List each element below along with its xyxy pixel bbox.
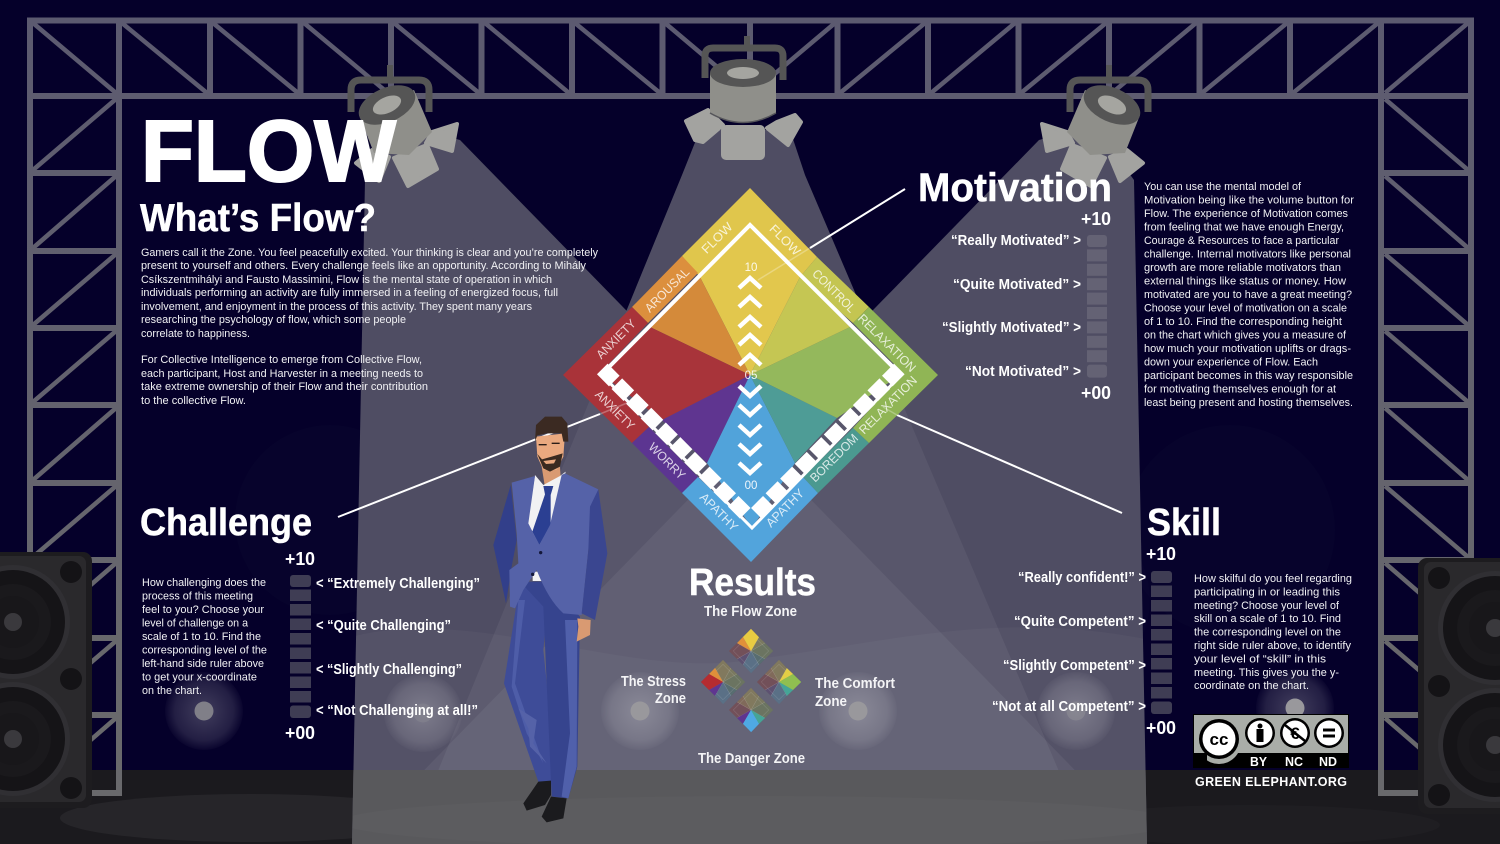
challenge text: scale of 1 to 10. Find the (142, 631, 261, 643)
skill heading: Skill (1147, 502, 1221, 544)
lamp: centre (686, 36, 801, 160)
hand (577, 618, 591, 642)
motivation text: on the chart which gives you a measure of (1144, 330, 1347, 342)
motivation scale: “Quite Motivated” > (953, 277, 1081, 293)
left sleeve (493, 485, 517, 603)
band labels: RELAXATION (856, 373, 920, 437)
skill scale: “Quite Competent” > (1014, 614, 1146, 630)
creative commons badge: € (1290, 724, 1300, 743)
skill scale: +10 (1146, 544, 1176, 564)
skill text: the corresponding level on the (1194, 627, 1341, 639)
intro text: each participant, Host and Harvester in a meeting needs to (141, 368, 423, 380)
inner wedges (600, 225, 903, 528)
band labels: AROUSAL (642, 265, 692, 315)
motivation text: how much your motivation uplifts or drags- (1144, 343, 1351, 355)
skill scale: “Not at all Competent” > (992, 699, 1146, 715)
challenge scale: +10 (285, 549, 315, 569)
motivation scale (942, 209, 1111, 403)
speaker left (0, 552, 92, 808)
motivation text: of 1 to 10. Find the corresponding height (1144, 316, 1343, 328)
neck and face (535, 417, 568, 487)
intro text (141, 247, 598, 407)
up chevrons (739, 278, 761, 365)
motivation scale: +00 (1081, 383, 1111, 403)
skill text: right side ruler above, to identify (1194, 640, 1351, 652)
skill text: participating in or leading this (1194, 586, 1340, 598)
band labels: WORRY (646, 440, 688, 483)
challenge text: level of challenge on a (142, 618, 249, 630)
challenge text: to get your x-coordinate (142, 672, 257, 684)
intro text: individuals performing an activity are fully immersed in a feeling of energized focus, full (141, 287, 558, 299)
motivation scale: “Not Motivated” > (965, 364, 1081, 380)
panel: challenge (140, 502, 480, 743)
challenge scale: < “Extremely Challenging” (316, 576, 480, 592)
skill text: your level of “skill” in this (1194, 653, 1326, 665)
creative commons badge (1193, 714, 1349, 769)
intro text: take extreme ownership of their Flow and their contribution (141, 381, 428, 393)
website: GREEN ELEPHANT.ORG (1195, 775, 1347, 789)
results heading: Results (689, 562, 816, 604)
challenge text (142, 577, 267, 697)
mini diamond: comfort zone (757, 660, 801, 704)
skill text (1194, 573, 1352, 692)
zone labels: The Danger Zone (698, 751, 805, 767)
motivation text (1144, 181, 1354, 409)
band labels: ANXIETY (594, 316, 639, 362)
mini diamond: flow zone (729, 629, 773, 673)
scale numbers: 05 (745, 370, 757, 382)
challenge text: on the chart. (142, 685, 202, 697)
motivation text: external things like status or money. How (1144, 276, 1347, 288)
zone labels: Zone (655, 691, 686, 707)
motivation text: growth are more reliable motivators than (1144, 262, 1341, 274)
motivation heading: Motivation (918, 166, 1112, 210)
outer band segments (563, 188, 938, 562)
intro text: Csíkszentmihályi and Fausto Massimini, Flow is the mental state of operation in which (141, 274, 552, 286)
band labels: CONTROL (809, 267, 858, 316)
motivation text: challenge. Internal motivators like personal (1144, 248, 1351, 260)
shoes (523, 781, 567, 822)
faint callout lines over chart (600, 248, 897, 415)
speaker right (1418, 558, 1500, 814)
shirt (528, 472, 566, 545)
zone labels (621, 604, 895, 767)
creative commons badge: BY (1250, 755, 1268, 769)
motivation text: Courage & Resources to face a particular (1144, 235, 1339, 247)
motivation text: Flow. The experience of Motivation comes (1144, 208, 1348, 220)
panel: results (621, 562, 895, 767)
challenge text: left-hand side ruler above (142, 658, 264, 670)
skill scale: “Really confident!” > (1018, 570, 1146, 586)
motivation text: down your experience of Flow. Each (1144, 356, 1318, 368)
floor (0, 770, 1500, 844)
presenter figure (493, 417, 607, 822)
intro text: present to yourself and others. Every challenge feels like an opportunity. According to Mihály (141, 260, 586, 272)
challenge scale: < “Quite Challenging” (316, 618, 451, 634)
band labels: FLOW (699, 220, 736, 257)
challenge text: process of this meeting (142, 590, 253, 602)
spotlight beams (340, 125, 1180, 844)
skill text: How skilful do you feel regarding (1194, 573, 1352, 585)
challenge scale (285, 549, 480, 743)
motivation text: participant becomes in this way responsible (1144, 370, 1353, 382)
band labels: FLOW (766, 222, 803, 259)
skill text: coordinate on the chart. (1194, 680, 1309, 692)
band labels: APATHY (697, 490, 741, 535)
motivation text: Motivation being like the volume button for (1144, 194, 1354, 206)
subtitle: What’s Flow? (140, 197, 376, 240)
callout lines (338, 189, 1122, 517)
floor light glows (165, 669, 1334, 752)
band labels: ANXIETY (592, 388, 638, 433)
intro text: Gamers call it the Zone. You feel peacefully excited. Your thinking is clear and you’re completely (141, 247, 598, 259)
trousers (504, 582, 580, 798)
motivation text: Choose your level of motivation on a scale (1144, 302, 1347, 314)
motivation scale: “Slightly Motivated” > (942, 320, 1081, 336)
intro text: to the collective Flow. (141, 395, 246, 407)
creative commons badge: NC (1285, 755, 1303, 769)
skill text: meeting? Choose your level of (1194, 600, 1340, 612)
tie (532, 486, 553, 545)
challenge text: corresponding level of the (142, 644, 267, 656)
zone labels: The Comfort (815, 676, 895, 692)
intro text: involvement, and enjoyment in the process of this activity. They spent many years (141, 301, 532, 313)
motivation text: from feeling that we have enough Energy, (1144, 222, 1344, 234)
scale numbers (745, 262, 757, 492)
band labels: RELAXATION (855, 311, 919, 375)
motivation text: least being present and hosting themselves. (1144, 397, 1353, 409)
skill scale: “Slightly Competent” > (1003, 658, 1146, 674)
challenge text: How challenging does the (142, 577, 266, 589)
skill scale: +00 (1146, 718, 1176, 738)
skill text: skill on a scale of 1 to 10. Find (1194, 613, 1341, 625)
creative commons badge: cc (1210, 730, 1228, 749)
motivation text: for motivating themselves enough for at (1144, 384, 1337, 396)
motivation scale: “Really Motivated” > (951, 233, 1081, 249)
motivation text: You can use the mental model of (1144, 181, 1302, 193)
panel: skill (992, 502, 1352, 738)
intro text: researching the psychology of flow, which some people (141, 314, 406, 326)
skill scale (992, 544, 1176, 738)
band labels: BOREDOM (807, 431, 861, 485)
white frame (603, 225, 899, 373)
buttons (531, 551, 542, 576)
mini diamond: danger zone (729, 688, 773, 732)
challenge scale: +00 (285, 723, 315, 743)
zone labels: Zone (815, 694, 847, 710)
creative commons badge: ND (1319, 755, 1337, 769)
motivation text: motivated are you to have a great meeting? (1144, 289, 1352, 301)
band labels (592, 220, 920, 535)
zone labels: The Stress (621, 674, 686, 690)
zone labels: The Flow Zone (704, 604, 797, 620)
challenge scale: < “Not Challenging at all!” (316, 703, 478, 719)
skill text: meeting. This gives you the y- (1194, 667, 1339, 679)
haze circles (235, 425, 1335, 690)
down chevrons (739, 386, 761, 473)
mini diamond: stress zone (701, 660, 745, 704)
intro text: For Collective Intelligence to emerge from Collective Flow, (141, 354, 422, 366)
challenge text: feel to you? Choose your (142, 604, 264, 616)
jacket (509, 473, 598, 615)
challenge heading: Challenge (140, 502, 312, 544)
flow diamond chart (563, 188, 938, 562)
lamp: left (351, 65, 457, 186)
scale numbers: 10 (745, 262, 757, 274)
band labels: APATHY (763, 486, 808, 530)
main title: FLOW (141, 103, 397, 200)
right sleeve (582, 489, 607, 620)
intro text: correlate to happiness. (141, 328, 250, 340)
scale numbers: 00 (745, 480, 757, 492)
ruler ticks (597, 364, 905, 528)
panel: motivation (918, 166, 1354, 409)
motivation scale: +10 (1081, 209, 1111, 229)
lamp: right (1042, 65, 1148, 186)
challenge scale: < “Slightly Challenging” (316, 662, 462, 678)
